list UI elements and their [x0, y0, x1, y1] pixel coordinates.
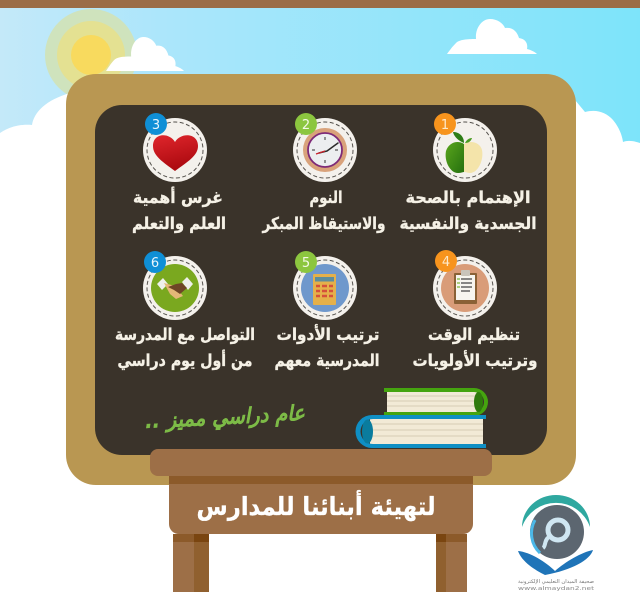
- icon: stacked books: [356, 388, 488, 448]
- number badge 5: 5: [302, 256, 310, 271]
- label 4: تنظيم الوقت: [428, 325, 520, 345]
- blue book: [356, 415, 486, 448]
- label 4: [412, 325, 538, 371]
- icon: apple: [433, 118, 497, 182]
- desk body: [169, 476, 473, 534]
- icon: sun: [45, 9, 137, 101]
- item 1: health: [400, 113, 536, 234]
- icon: handshake: [143, 256, 207, 320]
- logo: www.almaydan2.net: [518, 586, 595, 592]
- cloud top right: [447, 19, 537, 54]
- label 6: من أول يوم دراسي: [118, 350, 252, 371]
- desk legs: [173, 534, 467, 592]
- number badge 4: 4: [442, 255, 450, 270]
- green book: [384, 388, 488, 416]
- label 6: التواصل مع المدرسة: [115, 325, 255, 345]
- number badge 1: 1: [441, 118, 449, 133]
- title: لتهيئة أبنائنا للمدارس: [196, 490, 436, 522]
- top brown bar: [0, 0, 640, 8]
- label 1: الإهتمام بالصحة: [406, 188, 530, 207]
- label 3: [132, 187, 226, 234]
- icon: calculator: [293, 256, 357, 320]
- label 2: النوم: [310, 188, 342, 208]
- panel: chalkboard: [95, 105, 547, 455]
- item 5: tools: [274, 251, 380, 371]
- label 2: والاستيقاظ المبكر: [262, 214, 386, 234]
- item 3: learning: [132, 113, 226, 234]
- item 4: time: [412, 250, 538, 371]
- label 5: ترتيب الأدوات: [276, 324, 380, 345]
- icon: clipboard: [433, 256, 497, 320]
- item 6: communication: [115, 251, 255, 371]
- panel: chalkboard frame: [66, 74, 576, 485]
- number badge 3: 3: [152, 118, 160, 133]
- cloud right: [572, 96, 640, 150]
- label 3: غرس أهمية: [133, 187, 223, 208]
- label 6: [115, 325, 255, 371]
- label 1: [400, 188, 536, 234]
- label 5: [274, 324, 380, 371]
- cloud left: [0, 93, 70, 150]
- label 2: [262, 188, 386, 234]
- number badge 6: 6: [151, 256, 159, 271]
- label 3: العلم والتعلم: [132, 214, 226, 234]
- cloud near sun: [106, 37, 184, 71]
- label 4: وترتيب الأولويات: [412, 350, 538, 371]
- icon: clock: [293, 118, 357, 182]
- label 1: الجسدية والنفسية: [400, 214, 536, 234]
- label 5: المدرسية معهم: [274, 351, 380, 371]
- item 2: sleep: [262, 113, 386, 234]
- icon: heart: [143, 118, 207, 182]
- slogan: عام دراسي مميز ..: [144, 401, 306, 434]
- desk shadow band: [169, 476, 473, 484]
- background sky: [0, 8, 640, 148]
- logo: [518, 495, 595, 592]
- desk top: [150, 449, 492, 476]
- logo: صحيفة الميدان التعليمي الإلكترونية: [518, 579, 594, 585]
- number badge 2: 2: [302, 118, 310, 133]
